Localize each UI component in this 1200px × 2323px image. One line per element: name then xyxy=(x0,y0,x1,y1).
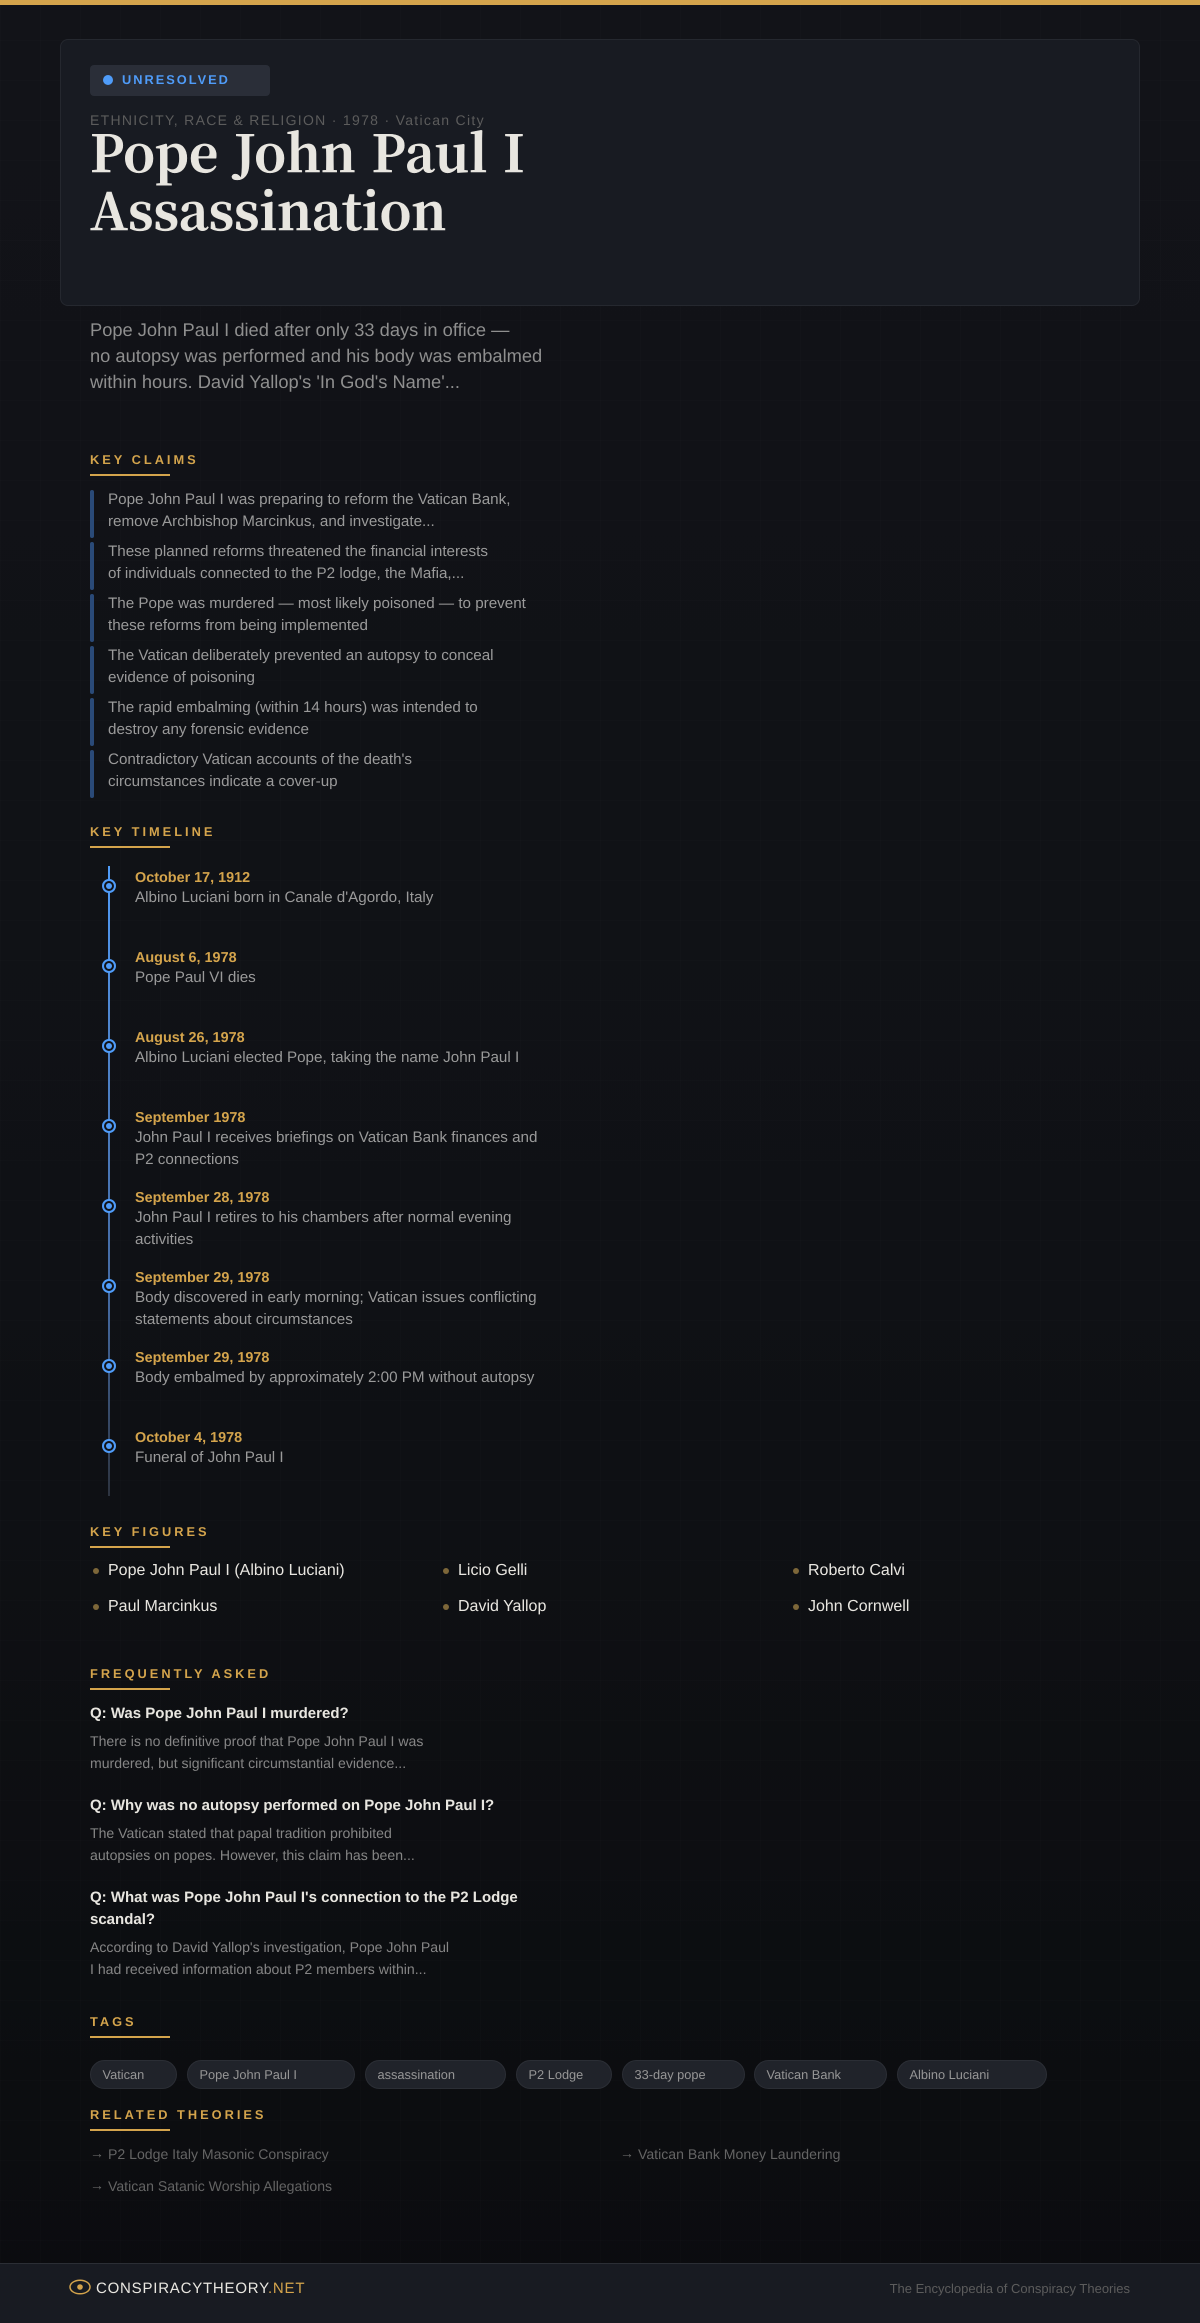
event 1: October 17, 1912 xyxy=(135,870,250,886)
tag row xyxy=(90,2060,1047,2089)
claim 1: remove Archbishop Marcinkus, and investigate... xyxy=(108,513,435,530)
claim 5: destroy any forensic evidence xyxy=(108,721,309,738)
answer 2 xyxy=(90,1825,415,1863)
panel: key claims xyxy=(90,452,526,798)
event 7: September 29, 1978 xyxy=(135,1350,269,1366)
footer tagline: The Encyclopedia of Conspiracy Theories xyxy=(890,2281,1130,2296)
figure: Cornwell: John Cornwell xyxy=(808,1598,909,1615)
title xyxy=(90,113,525,245)
claim 3: these reforms from being implemented xyxy=(108,617,368,634)
answer 1: murdered, but significant circumstantial evidence... xyxy=(90,1755,406,1771)
tag: Albino Luciani xyxy=(910,2067,989,2082)
title: Pope John Paul I xyxy=(90,113,525,187)
event 5 xyxy=(102,1190,512,1248)
footer logo text: CONSPIRACYTHEORY.NET xyxy=(96,2280,305,2297)
figure: Luciani: Pope John Paul I (Albino Luciani) xyxy=(108,1562,345,1579)
event 6: statements about circumstances xyxy=(135,1311,353,1328)
tag: Vatican Bank xyxy=(766,2067,841,2082)
event 5: September 28, 1978 xyxy=(135,1190,269,1206)
event 4 xyxy=(102,1110,537,1168)
question 3: Q: What was Pope John Paul I's connection to the P2 Lodge xyxy=(90,1889,518,1906)
claim 6: Contradictory Vatican accounts of the death's xyxy=(108,751,412,768)
event 1 xyxy=(102,870,434,906)
footer bar xyxy=(0,2263,1200,2323)
related link 3: → Vatican Satanic Worship Allegations xyxy=(90,2176,332,2194)
event 7 xyxy=(102,1350,534,1386)
answer 2: The Vatican stated that papal tradition prohibited xyxy=(90,1825,392,1841)
title: Assassination xyxy=(90,171,446,245)
event 3: Albino Luciani elected Pope, taking the name John Paul I xyxy=(135,1049,519,1066)
panel: header card xyxy=(60,39,1140,306)
panel: key figures xyxy=(90,1524,909,1615)
related link 1: → P2 Lodge Italy Masonic Conspiracy xyxy=(90,2144,329,2162)
event 2: Pope Paul VI dies xyxy=(135,969,256,986)
heading: tags: TAGS xyxy=(90,2014,137,2029)
claim 6: circumstances indicate a cover-up xyxy=(108,773,338,790)
event 5: John Paul I retires to his chambers after normal evening xyxy=(135,1209,512,1226)
event 3 xyxy=(102,1030,519,1066)
claim 4 xyxy=(90,646,494,694)
status badge xyxy=(90,65,270,96)
figure: Calvi: Roberto Calvi xyxy=(808,1562,905,1579)
tag xyxy=(365,2060,506,2089)
icon: eye logo xyxy=(69,2280,91,2294)
answer 3: According to David Yallop's investigation, Pope John Paul xyxy=(90,1939,449,1955)
event 7: Body embalmed by approximately 2:00 PM without autopsy xyxy=(135,1369,534,1386)
tag xyxy=(516,2060,612,2089)
answer 3: I had received information about P2 members within... xyxy=(90,1961,426,1977)
panel: frequently asked xyxy=(90,1666,518,1977)
event 4: P2 connections xyxy=(135,1151,239,1168)
lede text: within hours. David Yallop's 'In God's Name'... xyxy=(90,371,460,392)
question 1: Q: Was Pope John Paul I murdered? xyxy=(90,1705,349,1722)
event 6: September 29, 1978 xyxy=(135,1270,269,1286)
question 3: scandal? xyxy=(90,1911,155,1928)
timeline axis xyxy=(108,866,110,1496)
heading: key figures: KEY FIGURES xyxy=(90,1524,210,1539)
panel: key timeline xyxy=(90,824,537,1496)
heading: related theories: RELATED THEORIES xyxy=(90,2107,266,2122)
tag xyxy=(897,2060,1047,2089)
event 2: August 6, 1978 xyxy=(135,950,237,966)
category line: ETHNICITY, RACE & RELIGION · 1978 · Vatican City xyxy=(90,112,485,128)
panel: related theories xyxy=(90,2107,840,2194)
heading: key claims: KEY CLAIMS xyxy=(90,452,199,467)
figure: Gelli: Licio Gelli xyxy=(458,1562,527,1579)
claim 3: The Pope was murdered — most likely poisoned — to prevent xyxy=(108,595,526,612)
figure: Yallop: David Yallop xyxy=(458,1598,546,1615)
claim 5 xyxy=(90,698,478,746)
related link 2: → Vatican Bank Money Laundering xyxy=(620,2144,840,2162)
event 1: Albino Luciani born in Canale d'Agordo, Italy xyxy=(135,889,433,906)
answer 1: There is no definitive proof that Pope John Paul I was xyxy=(90,1733,423,1749)
claim 3 xyxy=(90,594,526,642)
claim 2 xyxy=(90,542,488,590)
claim 4: evidence of poisoning xyxy=(108,669,255,686)
lede text xyxy=(90,319,542,392)
tag xyxy=(622,2060,745,2089)
event 8 xyxy=(102,1430,284,1466)
claim 5: The rapid embalming (within 14 hours) was intended to xyxy=(108,699,478,716)
event 2 xyxy=(102,950,256,986)
heading: key timeline: KEY TIMELINE xyxy=(90,824,215,839)
claim 4: The Vatican deliberately prevented an autopsy to conceal xyxy=(108,647,494,664)
claim 1: Pope John Paul I was preparing to reform the Vatican Bank, xyxy=(108,491,510,508)
event 6: Body discovered in early morning; Vatican issues conflicting xyxy=(135,1289,537,1306)
tag: Vatican xyxy=(102,2067,144,2082)
claim 2: of individuals connected to the P2 lodge, the Mafia,... xyxy=(108,565,464,582)
heading: frequently asked: FREQUENTLY ASKED xyxy=(90,1666,271,1681)
tag xyxy=(754,2060,887,2089)
question 2: Q: Why was no autopsy performed on Pope John Paul I? xyxy=(90,1797,494,1814)
claim 1 xyxy=(90,490,510,538)
event 8: October 4, 1978 xyxy=(135,1430,242,1446)
question 3 xyxy=(90,1889,518,1928)
event 8: Funeral of John Paul I xyxy=(135,1449,284,1466)
icon: status dot xyxy=(103,75,113,85)
panel: tags xyxy=(90,2014,1047,2089)
claim 2: These planned reforms threatened the financial interests xyxy=(108,543,488,560)
lede text: no autopsy was performed and his body was embalmed xyxy=(90,345,542,366)
answer 3 xyxy=(90,1939,449,1977)
badge label: UNRESOLVED xyxy=(122,72,230,87)
tag: assassination xyxy=(378,2067,455,2082)
answer 1 xyxy=(90,1733,423,1771)
top accent bar xyxy=(0,0,1200,5)
figure: Marcinkus: Paul Marcinkus xyxy=(108,1598,217,1615)
answer 2: autopsies on popes. However, this claim has been... xyxy=(90,1847,415,1863)
claim 6 xyxy=(90,750,412,798)
tag: P2 Lodge xyxy=(528,2067,583,2082)
event 5: activities xyxy=(135,1231,193,1248)
event 4: September 1978 xyxy=(135,1110,245,1126)
event 4: John Paul I receives briefings on Vatican Bank finances and xyxy=(135,1129,537,1146)
lede text: Pope John Paul I died after only 33 days in office — xyxy=(90,319,509,340)
tag xyxy=(187,2060,355,2089)
tag: Pope John Paul I xyxy=(200,2067,297,2082)
event 6 xyxy=(102,1270,537,1328)
event 3: August 26, 1978 xyxy=(135,1030,245,1046)
tag: 33-day pope xyxy=(634,2067,706,2082)
tag xyxy=(90,2060,177,2089)
